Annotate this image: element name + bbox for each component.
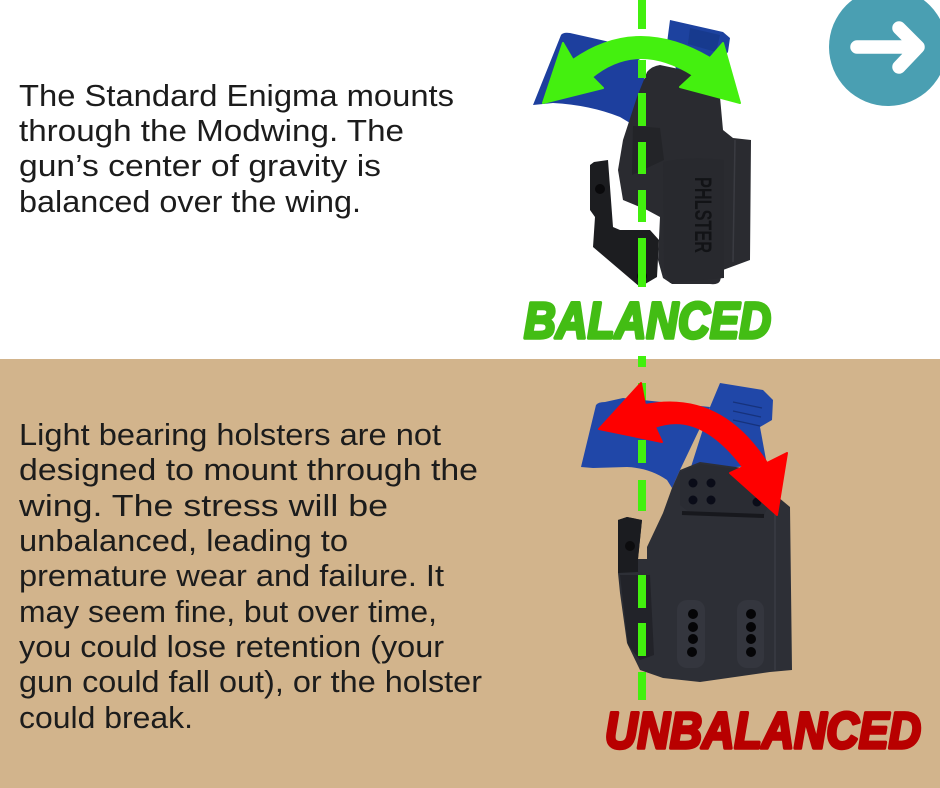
text block: light bearing holster description: Light bearing holsters are not [19,418,442,452]
center line behind unbalanced holster top [638,383,646,405]
panel: balanced section background [0,0,940,359]
holster top mounting holes [688,478,762,506]
center of gravity dashed line: balanced [638,0,646,367]
text block: light bearing holster description: you could lose retention (your [19,630,444,664]
holster brand mark: PHLSTER [689,177,716,253]
arrow: balanced green double arrow [543,37,740,103]
text block: light bearing holster description: gun could fall out), or the holster [19,665,482,699]
modwing clip [590,160,659,287]
text block: standard enigma description: balanced over the wing. [19,185,361,219]
illustration: light bearing holster with pistol [581,383,792,682]
holster left belt slot [677,600,705,668]
text block: light bearing holster description: premature wear and failure. It [19,559,445,593]
text block: standard enigma description: through the Modwing. The [19,114,404,148]
pistol grip [533,33,645,123]
pistol slide [690,383,773,470]
arrow: unbalanced red double arrow [599,383,787,515]
icon: next arrow button [829,0,940,106]
text block: light bearing holster description: designed to mount through the [19,453,478,487]
text block: light bearing holster description: may seem fine, but over time, [19,595,437,629]
wing clip lower section [620,575,654,660]
center of gravity dashed line: unbalanced [638,440,646,700]
text block: light bearing holster description [18,418,482,735]
label: balanced: BALANCED [524,292,771,349]
text block: light bearing holster description: could break. [19,701,193,735]
text block: light bearing holster description: wing. The stress will be [18,489,388,523]
text block: light bearing holster description: unbalanced, leading to [19,524,348,558]
holster body [618,462,792,682]
text block: standard enigma description: gun’s center of gravity is [19,149,381,183]
holster body [618,65,751,284]
text block: standard enigma description [19,79,454,219]
text block: standard enigma description: The Standard Enigma mounts [19,79,454,113]
pistol grip [581,398,710,488]
pistol slide [667,20,730,80]
holster right belt slot [737,600,764,668]
panel: unbalanced section background [0,359,940,788]
illustration: standard enigma holster with pistol [533,20,751,287]
